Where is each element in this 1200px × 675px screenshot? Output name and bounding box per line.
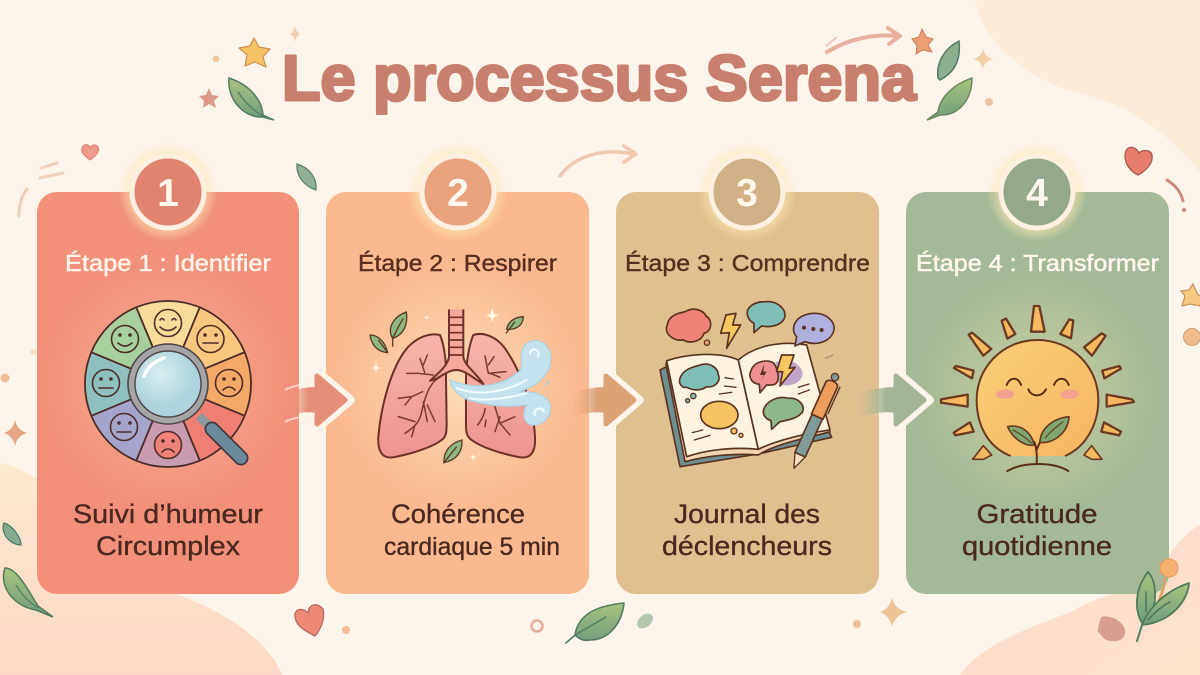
- step 1 description: Suivi d’humeur: [73, 499, 263, 529]
- icon: mood wheel with magnifier: [85, 301, 251, 467]
- glow behind sun: [917, 275, 1157, 515]
- number badge 2: 2: [447, 172, 469, 215]
- step 3 description: déclencheurs: [662, 531, 832, 561]
- step 4 description: [962, 499, 1112, 561]
- panel: step 3: [616, 142, 879, 594]
- decoration: left side hearts and leaves: [0, 145, 636, 617]
- number badge 4: [987, 142, 1087, 242]
- number badge 3: 3: [736, 172, 758, 215]
- step 1 description: Circumplex: [96, 531, 241, 561]
- trachea: [430, 309, 483, 384]
- step 4 description: quotidienne: [962, 531, 1112, 561]
- bronchi: [398, 355, 515, 437]
- number badge 1: [118, 142, 218, 242]
- number badge 3: [697, 142, 797, 242]
- step 3 heading: Étape 3 : Comprendre: [625, 250, 870, 276]
- step 3 description: [662, 499, 832, 561]
- step 1 heading: Étape 1 : Identifier: [65, 250, 271, 276]
- panel: step 2: [326, 142, 589, 594]
- number badge 2: [408, 142, 508, 242]
- number badge 4: 4: [1026, 172, 1048, 215]
- number badge 1: 1: [157, 172, 179, 215]
- arrow: step 2 to step 3: [572, 370, 640, 430]
- title decorations: [199, 26, 993, 120]
- panel: step 4: [906, 142, 1169, 594]
- step 4 heading: Étape 4 : Transformer: [916, 250, 1159, 276]
- title: Le processus Serena: [282, 42, 916, 114]
- arrow: step 1 to step 2: [285, 370, 351, 430]
- icon: lungs with breath: [370, 308, 551, 463]
- step 4 description: Gratitude: [976, 499, 1098, 529]
- step 2 description: Cohérence: [391, 499, 525, 529]
- step 2 description: cardiaque 5 min: [384, 533, 560, 561]
- icon: open journal with speech bubbles: [660, 302, 844, 472]
- decoration: right side heart, stars and plant: [1098, 147, 1200, 641]
- icon: smiling sun with sprout: [941, 306, 1134, 471]
- arrow: step 3 to step 4: [860, 370, 930, 430]
- step 3 description: Journal des: [674, 499, 820, 529]
- decoration: bottom hearts, leaf and stars: [295, 597, 907, 643]
- glow behind lungs: [333, 260, 583, 510]
- step 2 heading: Étape 2 : Respirer: [358, 250, 557, 276]
- panel: step 1: [37, 142, 299, 594]
- glow behind mood wheel: [43, 259, 293, 509]
- step 2 description: [384, 499, 560, 561]
- step 1 description: [73, 499, 263, 561]
